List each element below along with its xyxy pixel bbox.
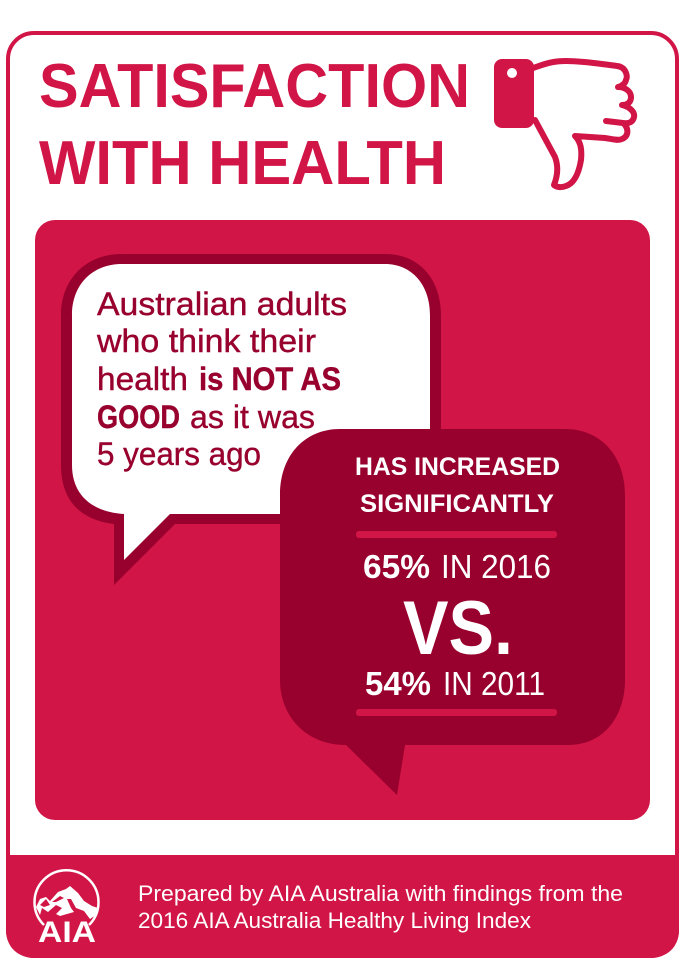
text: bubble statement: Australian adults (97, 286, 347, 322)
speech bubble: white (61, 254, 441, 585)
logo: AIA (34, 870, 99, 949)
text: has increased significantly: SIGNIFICANTLY (360, 490, 554, 518)
text: bubble statement: who think their (96, 323, 316, 359)
text: 65% in 2016: 65% (363, 548, 430, 585)
title: WITH HEALTH (39, 129, 446, 198)
text: VS.: VS. (403, 586, 513, 671)
text: bubble statement (96, 286, 347, 472)
text: footer note: Prepared by AIA Australia with findings from the (138, 881, 623, 906)
text: 54% in 2011 (365, 665, 545, 702)
text: footer note: 2016 AIA Australia Healthy Living Index (138, 908, 532, 933)
text: has increased significantly (355, 453, 560, 518)
text: 65% in 2016 (363, 548, 551, 585)
divider: top rule (356, 531, 557, 538)
text: has increased significantly: HAS INCREASED (355, 453, 560, 481)
text: 65% in 2016: IN 2016 (441, 548, 551, 585)
text: 54% in 2011: 54% (365, 665, 431, 702)
title (39, 52, 470, 198)
text: bubble statement: health (97, 361, 188, 397)
text: 54% in 2011: IN 2011 (443, 665, 545, 702)
text: bubble statement: 5 years ago (97, 436, 261, 472)
speech bubble: dark red (280, 429, 625, 795)
panel: main red panel (35, 220, 650, 820)
logo: AIA: AIA (38, 916, 96, 949)
icon: thumbs down (494, 59, 634, 187)
panel: footer band (6, 855, 679, 958)
title: SATISFACTION (39, 52, 470, 121)
text: bubble statement: GOOD (97, 399, 180, 435)
text: footer note (138, 881, 623, 933)
divider: bottom rule (356, 709, 557, 716)
text: bubble statement: as it was (190, 399, 315, 435)
text: bubble statement: is NOT AS (199, 361, 341, 397)
